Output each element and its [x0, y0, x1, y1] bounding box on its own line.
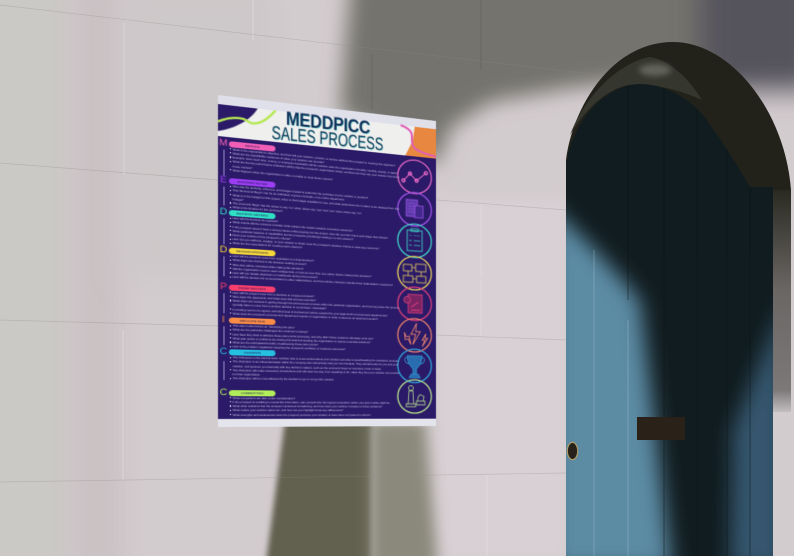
icon: documents: [398, 191, 431, 227]
decision criteria questions: How can you address, engage, or your solution to better meet the prospect's decision criteria or ease any concerns?: [233, 237, 379, 251]
competition questions: What other solutions has the prospect mentioned considering, and how does your solution compare to those solutions?: [233, 404, 382, 408]
paper process questions: What steps are involved in getting through the procurement process within the particular organization, and how long does the process typically take to move from a product decision to a purchase / download?: [233, 299, 399, 311]
paper process questions: What does the prospect's procurement department require of organization in order to become an approved vendor?: [233, 311, 378, 321]
letter M: M: [219, 137, 228, 148]
decision process questions: What steps are involved in the decision-making process?: [233, 258, 307, 266]
letter I: I: [222, 314, 225, 325]
champion questions: The champion will make necessary introductions and will clear the way, from speaking to the value they feel your solution can provide for their organization.: [233, 368, 399, 377]
pill: paper process: PAPER PROCESS: [239, 286, 266, 291]
arch recess: [566, 42, 791, 556]
header decorations and icons: [218, 104, 436, 414]
metrics side bar: [223, 149, 224, 175]
icon: chess pieces: [398, 380, 431, 413]
decision criteria questions: How will this decision be reached?: [233, 216, 278, 224]
implicate pain questions: How is the problem negatively impacting the prospect's workflow or business outcomes?: [233, 345, 345, 351]
letter P: P: [220, 281, 227, 292]
implicate pain questions: What pain points or problems are driving this deal and leading the organization to explore potential solutions?: [233, 336, 371, 344]
decision criteria questions: Does your solution fit the prospect's criteria?: [233, 233, 290, 241]
implicate pain questions: [230, 324, 374, 351]
lower wall shadow: [265, 420, 372, 556]
champion questions: The Champion is the internal team member who is most excited about your solution and who is spearheading the evaluation process.: [233, 356, 399, 363]
competition questions: What makes your solution stand out, and how can you highlight those key differences?: [233, 408, 343, 412]
champion side bar: [223, 361, 224, 380]
metrics questions: What happens when the organization is able or unable to meet those metrics?: [233, 168, 333, 181]
metrics questions: What are the quantifiable measures of value your solution can provide?: [233, 151, 324, 164]
implicate pain questions: This step is also known as "Identifying the pain.": [233, 324, 295, 330]
decision process questions: How will you handle objections or roadblocks during this process?: [233, 271, 318, 279]
paper process side bar: [223, 293, 224, 313]
letter C: C: [220, 346, 227, 357]
decision criteria questions: [230, 216, 388, 251]
metrics questions: What is the organization's objective, and how will your solution, product, or service address the prospect in meeting this objective?: [233, 147, 395, 167]
champion questions: The champion will be most affected by the decision to go or not go this solution.: [233, 376, 334, 382]
pill: competition: COMPETITION: [241, 391, 264, 395]
implicate pain questions: How have they tried to address these pain points previously, and why didn't those solutions ultimately work out?: [233, 332, 373, 340]
decision process questions: Will the organization need to seek multiple bids, or look at more than one option before making their decision?: [233, 267, 371, 278]
decision process questions: [230, 254, 394, 287]
letter D: D: [220, 244, 227, 256]
poster: [218, 95, 436, 427]
decoration: green wave: [218, 104, 276, 128]
implicate pain questions: What are the anticipated benefits of addressing these pain points?: [233, 340, 318, 347]
paper process questions: Who signs the paperwork, and what does that process look like?: [233, 295, 316, 302]
decision process questions: How will the decision be communicated to other stakeholders, and how will the champion handle those stakeholders' questions?: [233, 275, 393, 287]
section: competition: [220, 387, 390, 417]
paper process questions: Is funding need to be signed, and what level of involvement will be required by your legal and/or procurement departments?: [233, 307, 387, 317]
economic buyer questions: This "Economic Buyer" can be an individual, a group of people, or an entire department.: [233, 189, 345, 202]
pill: champion: CHAMPION: [244, 351, 261, 355]
upper wall shadow: [340, 0, 794, 165]
metrics questions: [230, 147, 400, 181]
pill: economic buyer: ECONOMIC BUYER: [237, 180, 267, 186]
pill: competition: [229, 390, 276, 396]
decision criteria questions: What particular features or capabilities are the prospects prioritizing/ ranking in a new solution?: [233, 229, 353, 241]
pill: decision process: [229, 248, 276, 256]
paper process questions: [230, 290, 400, 321]
icon: decision flow: [398, 255, 431, 291]
pill: decision criteria: [229, 210, 276, 219]
pill: metrics: METRICS: [245, 143, 260, 149]
section: decision criteria: [220, 206, 388, 251]
decision process questions: How will the prospect move from evaluation to a final decision?: [233, 254, 314, 263]
pill: implicate pain: [229, 317, 276, 325]
economic buyer questions: What is in the budget for this project, when is that budget available for use, and what parameters are in place to be released from that budget?: [233, 193, 399, 210]
champion questions: [230, 356, 400, 382]
poster bottom strip: [218, 419, 436, 427]
poster top strip: [218, 95, 436, 129]
pill: metrics: [229, 141, 276, 151]
decoration: dark blob: [218, 104, 258, 135]
icon: contract signing: [398, 286, 431, 321]
champion questions: The champion is an influential leader within the company who will actively help you win this deal. They will advocate for you and your solution, and sponsor you internally with key decision-makers, such as the economic buyer or members of the C-Suite.: [233, 360, 398, 370]
pill: implicate pain: IMPLICATE PAIN: [240, 319, 265, 324]
decision process side bar: [223, 256, 224, 276]
section: economic buyer: [220, 174, 400, 215]
economic buyer side bar: [223, 186, 224, 205]
implicate pain questions: What are the particular challenges the customer is facing?: [233, 328, 308, 334]
competition questions: What strengths and weaknesses does the prospect perceive your solution to have when compared to others?: [233, 413, 371, 416]
implicate pain side bar: [223, 326, 224, 345]
letter E: E: [220, 174, 227, 186]
paper process questions: How will the project move from a decision to a signed contract?: [233, 290, 314, 298]
competition questions: [230, 396, 390, 417]
decoration: pink curve: [401, 125, 436, 157]
metrics questions: What are the key performance indicators (KPIs) that the prospect's organization tracks, and how can they see your solution improving those metrics?: [233, 160, 399, 179]
pill: decision process: DECISION PROCESS: [236, 249, 268, 255]
arch right jamb: [773, 190, 791, 412]
decision process questions: Who else will be consulted while making this decision?: [233, 262, 304, 270]
pill: champion: [229, 349, 276, 356]
door keyhole: [567, 442, 578, 460]
decision criteria side bar: [223, 218, 224, 244]
icon: clipboard checklist: [398, 223, 431, 259]
metrics questions: Example: How much time, money, or employee bandwidth will the solution save the organization annually, monthly, weekly, or daily?: [233, 156, 397, 175]
subtitle: SALES PROCESS: [272, 123, 383, 155]
icon: lightning bolts: [398, 318, 431, 352]
economic buyer questions: The economic Buyer has the power to say "no" when others say "yes" and "yes" when others say "no": [233, 201, 362, 215]
pill: decision criteria: DECISION CRITERIA: [236, 211, 268, 218]
letter C: C: [220, 387, 227, 398]
title: MEDDPICC: [286, 108, 370, 138]
icon: line chart: [398, 158, 431, 195]
letter D: D: [220, 206, 227, 218]
pill: economic buyer: [229, 178, 276, 188]
icon: trophy: [398, 349, 431, 383]
decision criteria questions: What criteria will the prospect consider while judging the solution against competing solutions?: [233, 220, 353, 233]
economic buyer questions: [230, 184, 400, 215]
pill: paper process: [229, 284, 276, 292]
economic buyer questions: Who has the authority, influence, and budget needed to authorize the purchase of your solution or product?: [233, 184, 368, 200]
poster header band: [218, 95, 436, 159]
door letter box: [637, 417, 685, 440]
section: decision process: [220, 244, 394, 287]
arch transom: [570, 57, 702, 135]
section: paper process: [220, 281, 400, 321]
decoration: orange shape: [405, 126, 436, 159]
competition questions: What competitors are also under consideration?: [233, 396, 295, 400]
decision criteria questions: If the prospect doesn't have a strong criteria outlined going into the project, how can you help frame and shape that criteria?: [233, 225, 388, 239]
section: implicate pain: [222, 314, 374, 351]
decision criteria questions: What are the expectations for meeting each criterion?: [233, 241, 302, 250]
section: metrics: [218, 137, 400, 181]
blue door: [566, 84, 773, 556]
competition questions: If the prospect is unwilling to reveal this information, ask yourself who the logical competitors within your given niche might be.: [233, 400, 390, 405]
economic buyer questions: What is the timeline for this purchase?: [233, 205, 283, 213]
wall joints: [0, 5, 600, 482]
section: champion: [220, 346, 400, 382]
